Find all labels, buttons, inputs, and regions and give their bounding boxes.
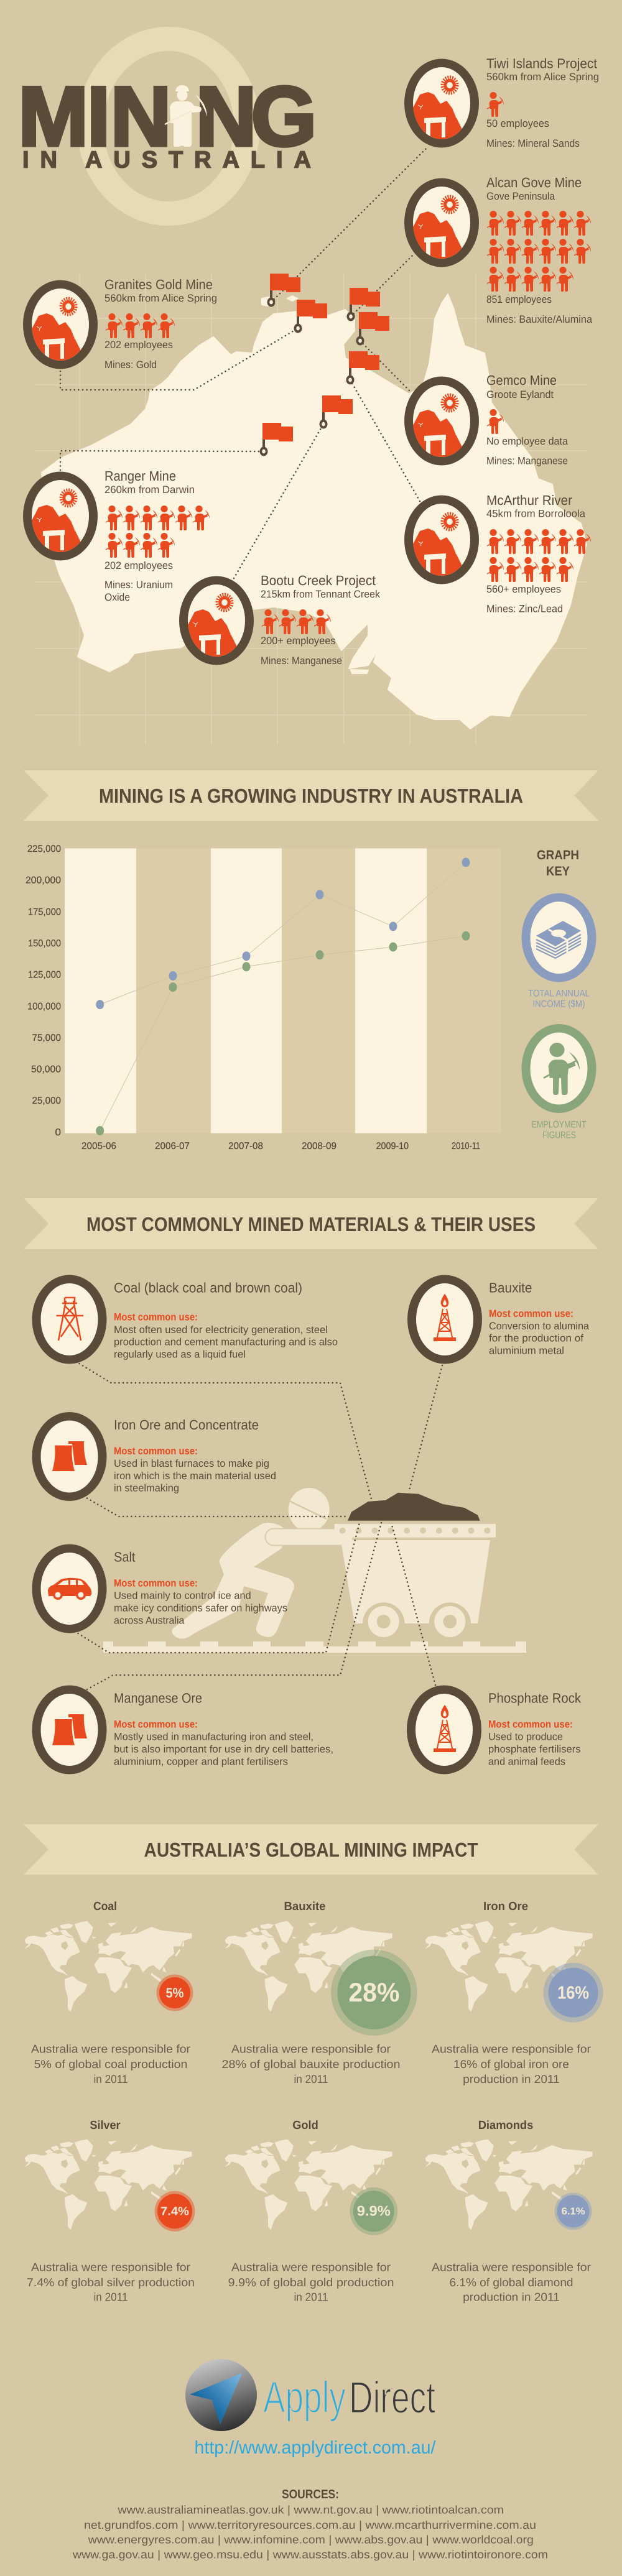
mine: McArthur River: 45km from Borroloola [486, 507, 586, 520]
y axis labels: 100,000 [27, 1001, 61, 1012]
mine: McArthur River: 560+ employees [486, 583, 561, 595]
impact: Diamonds [425, 2119, 592, 2304]
material: Coal: Most often used for electricity generation, steel [114, 1324, 328, 1336]
material: Salt: Salt [114, 1549, 136, 1565]
sources: www.energyres.com.au | www.infomine.com | www.abs.gov.au | www.worldcoal.org [88, 2534, 534, 2546]
impact: Gold: Australia were responsible for [231, 2261, 391, 2273]
material: Bauxite: Bauxite [489, 1280, 532, 1296]
impact: Silver [25, 2119, 195, 2304]
mine: Gemco Mine: Mines: Manganese [486, 455, 568, 466]
impact: Diamonds: 6.1% of global diamond [449, 2276, 573, 2289]
flag markers [260, 274, 389, 456]
mine: Ranger Mine: Oxide [104, 591, 130, 603]
mine: Alcan Gove Mine: Mines: Bauxite/Alumina [486, 313, 593, 325]
impact: Gold: 9.9% [357, 2202, 391, 2218]
graph key: KEY [546, 864, 570, 879]
y axis labels: 50,000 [31, 1064, 61, 1075]
website link: http://www.applydirect.com.au/ [194, 2438, 436, 2458]
impact: Bauxite [221, 1900, 417, 2085]
mine: Tiwi Islands Project: 560km from Alice Spring [486, 71, 599, 83]
material: Phosphate Rock: Most common use: [488, 1719, 573, 1730]
key: employment: FIGURES [542, 1130, 576, 1140]
material: Salt: make icy conditions safer on highways [114, 1603, 287, 1614]
mine: Bootu Creek Project: 215km from Tennant Creek [261, 588, 381, 600]
impact: Silver: Australia were responsible for [31, 2261, 190, 2273]
impact: Gold: in 2011 [294, 2291, 328, 2304]
impact: Iron Ore: 16% [557, 1983, 589, 2003]
key: employment: EMPLOYMENT [532, 1119, 587, 1130]
banner: global impact: AUSTRALIA’S GLOBAL MINING IMPACT [144, 1839, 478, 1861]
mine: McArthur River: McArthur River [486, 492, 572, 508]
mine: Granites Gold Mine: Mines: Gold [104, 359, 157, 371]
y axis labels [26, 844, 61, 1138]
mine: Bootu Creek Project: 200+ employees [261, 635, 336, 647]
y axis labels: 150,000 [28, 938, 61, 949]
mine: Granites Gold Mine [23, 277, 217, 371]
icon: title miner [165, 85, 207, 147]
material: Iron Ore [32, 1412, 276, 1501]
material: Manganese Ore: aluminium, copper and plant fertilisers [114, 1756, 288, 1767]
y axis labels: 225,000 [27, 844, 61, 854]
sources: SOURCES: [282, 2488, 339, 2501]
mine: Granites Gold Mine: Granites Gold Mine [104, 277, 213, 292]
material: Salt: across Australia [114, 1615, 185, 1627]
impact: Coal: 5% [165, 1985, 184, 2001]
y axis labels: 175,000 [28, 907, 61, 917]
banner: global impact [24, 1824, 598, 1875]
sources: www.ga.gov.au | www.geo.msu.edu | www.ausstats.abs.gov.au | www.riotintoironore.com [72, 2549, 548, 2561]
banner: growing industry: MINING IS A GROWING INDUSTRY IN AUSTRALIA [99, 785, 523, 807]
mine: Tiwi Islands Project [404, 56, 599, 149]
material: Manganese Ore: but is also important for use in dry cell batteries, [114, 1743, 333, 1755]
y axis labels: 200,000 [26, 875, 61, 886]
impact: Bauxite: in 2011 [294, 2072, 328, 2085]
banner: growing industry [24, 770, 598, 821]
y axis labels: 75,000 [32, 1033, 61, 1043]
graph key: GRAPH [537, 848, 579, 862]
mine: Gemco Mine: No employee data [486, 435, 569, 447]
icon: derrick [434, 1705, 456, 1752]
sources [72, 2488, 548, 2561]
graph key [521, 848, 596, 1140]
impact: Gold: 9.9% of global gold production [228, 2276, 394, 2289]
material: Salt [32, 1544, 287, 1633]
y axis labels: 0 [55, 1127, 61, 1138]
banner: materials: MOST COMMONLY MINED MATERIALS & THEIR USES [86, 1213, 536, 1235]
mine: Granites Gold Mine: 202 employees [104, 339, 173, 351]
y axis labels: 25,000 [32, 1096, 61, 1106]
material: Salt: Most common use: [114, 1578, 198, 1589]
key: employment [521, 1024, 596, 1140]
rail [103, 1641, 526, 1653]
material: Iron Ore: Iron Ore and Concentrate [114, 1417, 259, 1433]
title block [18, 27, 317, 226]
material: Phosphate Rock [407, 1685, 582, 1775]
mine: Bootu Creek Project [179, 573, 381, 667]
x axis labels: 2007-08 [228, 1141, 263, 1152]
impact: Coal [25, 1900, 193, 2085]
material: Iron Ore: iron which is the main material used [114, 1470, 276, 1482]
x axis labels: 2009-10 [376, 1141, 409, 1152]
banner: materials [24, 1198, 598, 1249]
mine: Bootu Creek Project: Mines: Manganese [261, 655, 342, 667]
key: income [521, 893, 596, 1010]
impact: Diamonds: Australia were responsible for [432, 2261, 591, 2273]
line chart [26, 844, 501, 1152]
icon: cooling towers [52, 1714, 87, 1745]
mine: Ranger Mine: 202 employees [104, 560, 173, 571]
impact: Coal: Coal [93, 1900, 117, 1913]
sources: net.grundfos.com | www.territoryresources.com.au | www.mcarthurrivermine.com.au [84, 2519, 536, 2531]
dotted connector lines [60, 147, 427, 578]
coal pile [348, 1493, 480, 1521]
title word MINING: MINING [18, 69, 317, 164]
impact: Iron Ore [425, 1900, 603, 2085]
icon: derrick [434, 1294, 456, 1341]
impact: Diamonds: 6.1% [562, 2206, 585, 2217]
material: Phosphate Rock: Used to produce [488, 1731, 563, 1742]
impact: Diamonds: production in 2011 [463, 2291, 560, 2304]
impact: Bauxite: Australia were responsible for [231, 2043, 391, 2056]
cart [335, 1524, 496, 1637]
mine: Alcan Gove Mine: Alcan Gove Mine [486, 175, 582, 190]
icon: pylon [56, 1298, 83, 1341]
x axis labels: 2006-07 [155, 1141, 190, 1152]
mine: Bootu Creek Project: Bootu Creek Project [261, 573, 376, 588]
logo: ApplyDirect [185, 2359, 435, 2431]
mine: Gemco Mine [404, 372, 569, 466]
employment series [96, 931, 470, 1135]
x axis labels [81, 1141, 480, 1152]
x axis labels: 2010-11 [452, 1141, 480, 1152]
x axis labels: 2005-06 [81, 1141, 116, 1152]
key: income: INCOME ($M) [532, 999, 585, 1010]
impact: Coal: in 2011 [93, 2072, 128, 2085]
material: Manganese Ore [32, 1685, 333, 1775]
impact: Bauxite: 28% of global bauxite production [221, 2057, 401, 2070]
material: Iron Ore: in steelmaking [114, 1482, 179, 1493]
logo: ApplyDirect: Direct [349, 2373, 435, 2423]
impact: Diamonds: Diamonds [478, 2119, 533, 2132]
material: Phosphate Rock: and animal feeds [488, 1756, 565, 1767]
material: Coal [32, 1275, 338, 1364]
impact: Iron Ore: Iron Ore [483, 1900, 528, 1913]
pushing miner [172, 1488, 353, 1639]
mine: Granites Gold Mine: 560km from Alice Spring [104, 292, 217, 304]
icon: car [48, 1578, 91, 1600]
material: Coal: Coal (black coal and brown coal) [114, 1280, 302, 1296]
mine: Ranger Mine: Mines: Uranium [104, 579, 173, 591]
mine: Tiwi Islands Project: Mines: Mineral Sands [486, 137, 580, 149]
impact: Iron Ore: Australia were responsible for [432, 2043, 591, 2056]
icon: cooling towers [52, 1441, 87, 1471]
material: Iron Ore: Used in blast furnaces to make pig [114, 1458, 269, 1469]
material: Manganese Ore: Mostly used in manufacturing iron and steel, [114, 1731, 313, 1742]
impact: Iron Ore: 16% of global iron ore [453, 2057, 569, 2070]
mine: Alcan Gove Mine: Gove Peninsula [486, 190, 555, 202]
mine: Alcan Gove Mine [404, 175, 593, 325]
material: Coal: Most common use: [114, 1312, 198, 1323]
material: Iron Ore: Most common use: [114, 1446, 198, 1457]
impact: Bauxite: Bauxite [284, 1900, 326, 1913]
material: Bauxite: for the production of [489, 1333, 583, 1344]
mine: Tiwi Islands Project: 50 employees [486, 118, 549, 129]
material: Coal: production and cement manufacturing and is also [114, 1337, 338, 1348]
dotted material connectors [78, 1364, 442, 1689]
mine: Gemco Mine: Groote Eylandt [486, 389, 554, 400]
income series [96, 858, 470, 1009]
sources: www.australiamineatlas.gov.uk | www.nt.gov.au | www.riotintoalcan.com [117, 2504, 504, 2516]
mine: Gemco Mine: Gemco Mine [486, 372, 557, 388]
impact: Silver: in 2011 [93, 2291, 128, 2304]
mine: McArthur River [404, 492, 591, 615]
title subheading: IN AUSTRALIA [22, 147, 311, 173]
impact: Bauxite: 28% [348, 1978, 399, 2008]
mine: Ranger Mine [23, 468, 210, 603]
material: Coal: regularly used as a liquid fuel [114, 1349, 246, 1360]
mine: Ranger Mine: 260km from Darwin [104, 484, 195, 496]
mine cart illustration [103, 1488, 526, 1653]
material: Manganese Ore: Manganese Ore [114, 1690, 202, 1706]
mine: Tiwi Islands Project: Tiwi Islands Project [486, 56, 597, 71]
material: Bauxite: aluminium metal [489, 1346, 564, 1357]
mine: McArthur River: Mines: Zinc/Lead [486, 603, 563, 615]
material: Bauxite: Most common use: [489, 1308, 573, 1319]
impact: Gold [225, 2119, 397, 2304]
impact: Silver: 7.4% of global silver production [27, 2276, 195, 2289]
map of Australia [35, 147, 587, 744]
y axis labels: 125,000 [28, 970, 61, 981]
impact: Silver: Silver [90, 2119, 121, 2132]
logo: ApplyDirect: Apply [263, 2373, 346, 2422]
material: Phosphate Rock: Phosphate Rock [488, 1690, 582, 1706]
impact: Coal: Australia were responsible for [31, 2043, 190, 2056]
impact: Silver: 7.4% [160, 2205, 189, 2218]
impact: Gold: Gold [292, 2119, 318, 2132]
impact: Iron Ore: production in 2011 [463, 2072, 560, 2085]
impact: Coal: 5% of global coal production [34, 2057, 188, 2070]
mine: Alcan Gove Mine: 851 employees [486, 293, 552, 305]
material: Manganese Ore: Most common use: [114, 1719, 198, 1730]
material: Phosphate Rock: phosphate fertilisers [488, 1743, 581, 1755]
mine: Ranger Mine: Ranger Mine [104, 468, 176, 484]
x axis labels: 2008-09 [302, 1141, 337, 1152]
material: Salt: Used mainly to control ice and [114, 1590, 251, 1602]
material: Bauxite [407, 1275, 590, 1364]
material: Bauxite: Conversion to alumina [489, 1321, 590, 1332]
key: income: TOTAL ANNUAL [528, 989, 590, 999]
